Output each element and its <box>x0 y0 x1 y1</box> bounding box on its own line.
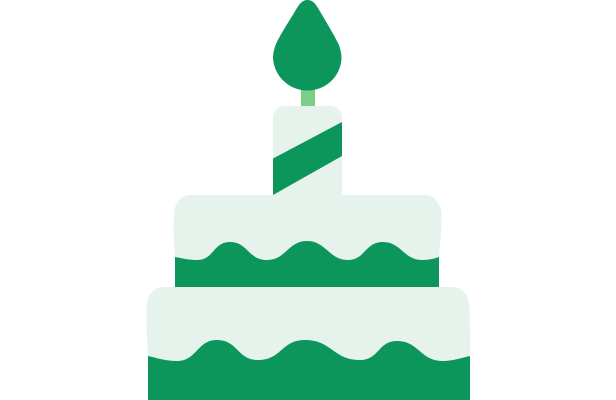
candle <box>273 106 342 195</box>
upper tier sponge <box>175 235 439 287</box>
lower tier frosting <box>146 287 470 361</box>
lower tier sponge <box>148 335 470 400</box>
icon: flame <box>273 0 342 90</box>
lower cake tier <box>146 287 470 400</box>
upper cake tier <box>174 195 442 287</box>
candle stripe <box>273 122 342 195</box>
upper tier frosting <box>174 195 442 260</box>
icon: candle stem <box>301 86 315 107</box>
candle body <box>273 106 342 195</box>
